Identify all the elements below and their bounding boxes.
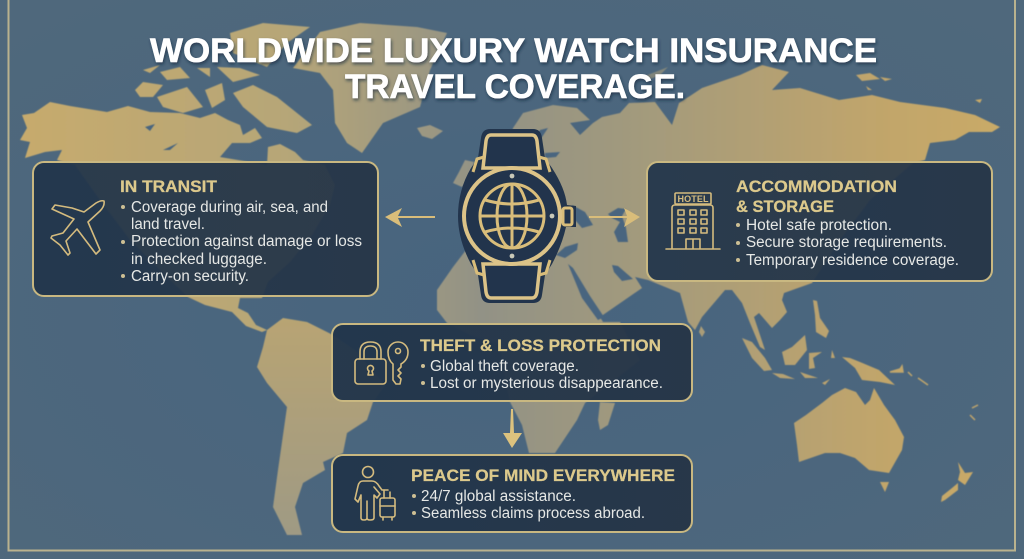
heading: [736, 177, 897, 216]
icon: hotel: HOTEL: [678, 194, 709, 204]
arrow: watch to in transit: [385, 208, 435, 227]
map: Greenland: [293, 23, 447, 153]
water overlays: seas and lakes: [145, 124, 633, 320]
bullet list: in checked luggage.: [131, 251, 267, 268]
map: Eurasia and Africa: [437, 65, 1000, 453]
arrow: down to peace of mind: [503, 409, 522, 448]
map: Indonesia and Philippines: [742, 300, 835, 385]
lower strap: [483, 264, 540, 298]
map: South America: [257, 318, 385, 535]
map: North America: [20, 102, 335, 332]
map: Australia: [794, 388, 904, 473]
map: Arctic islands: [135, 23, 312, 133]
panel: accommodation and storage: [647, 162, 992, 281]
bullet list: [412, 488, 645, 522]
icon: airplane: [51, 201, 104, 255]
icon: padlock and key: [355, 342, 408, 384]
bullet list: Carry-on security.: [131, 268, 249, 285]
globe: [480, 184, 544, 248]
case ring: [464, 168, 560, 264]
map: Arctic Siberia islands: [856, 73, 982, 103]
arrow: watch to accommodation: [589, 208, 640, 227]
title: [150, 32, 877, 106]
bullet list: [121, 199, 362, 285]
crown: [563, 208, 572, 225]
map: UK and Ireland: [453, 160, 474, 187]
dial markers: [510, 174, 554, 258]
map: Tasmania: [880, 482, 889, 492]
heading: IN TRANSIT: [120, 177, 218, 196]
icon: watch with globe: [458, 129, 576, 303]
title: TRAVEL COVERAGE.: [345, 68, 685, 106]
map: Sri Lanka: [699, 326, 705, 337]
icon: traveller with suitcase: [355, 466, 395, 520]
lugs: [473, 157, 550, 275]
bullet list: Coverage during air, sea, and: [131, 199, 328, 216]
map: New Zealand: [941, 462, 973, 502]
bullet list: Temporary residence coverage.: [746, 252, 959, 269]
heading: PEACE OF MIND EVERYWHERE: [411, 466, 675, 485]
heading: THEFT & LOSS PROTECTION: [420, 336, 661, 355]
heading: ACCOMMODATION: [736, 177, 897, 196]
watch dark silhouette: [458, 129, 576, 303]
map: Novaya Zemlya: [645, 67, 668, 80]
map: New Guinea: [842, 357, 895, 385]
bullet list: Secure storage requirements.: [746, 234, 947, 251]
map: Pacific islands: [890, 366, 978, 420]
heading: & STORAGE: [736, 197, 834, 216]
bullet list: 24/7 global assistance.: [421, 488, 576, 505]
bullet list: Protection against damage or loss: [131, 233, 362, 250]
bullet list: land travel.: [131, 216, 205, 233]
panel: peace of mind everywhere: [332, 455, 692, 532]
bullet list: [736, 217, 959, 269]
bullet list: Lost or mysterious disappearance.: [430, 375, 663, 392]
bullet list: Global theft coverage.: [430, 358, 579, 375]
bullet list: Hotel safe protection.: [746, 217, 892, 234]
panel: in transit: [33, 162, 378, 296]
title: WORLDWIDE LUXURY WATCH INSURANCE: [150, 32, 877, 70]
map: Madagascar: [598, 402, 615, 430]
panel: theft and loss protection: [332, 324, 692, 401]
bullet list: Seamless claims process abroad.: [421, 505, 645, 522]
map: Iceland: [417, 125, 443, 139]
icon: hotel: [666, 193, 720, 249]
upper strap: [483, 135, 540, 168]
bullet list: [421, 358, 663, 392]
